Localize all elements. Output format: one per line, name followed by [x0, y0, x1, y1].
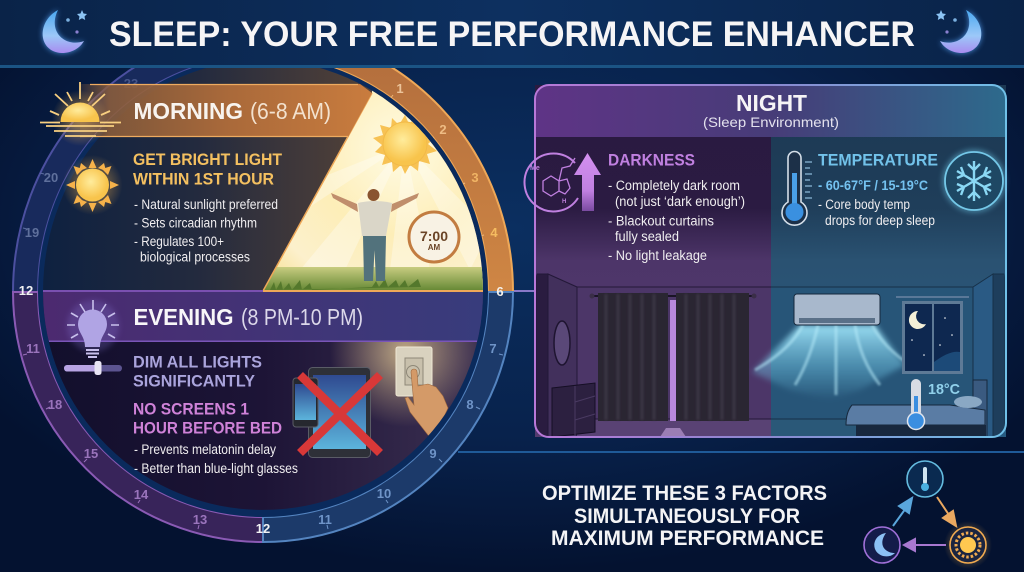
icon: sun node	[944, 521, 992, 569]
man with raised arms	[331, 189, 419, 281]
darkness bullet list: - Blackout curtains	[608, 214, 714, 228]
icon: crossed out phone and tablet	[293, 368, 380, 458]
hour numbers: 2	[439, 122, 447, 137]
night header: (Sleep Environment)	[703, 114, 839, 130]
temperature bullet list: - Core body temp	[818, 197, 910, 212]
icon: right crescent moon with stars	[936, 10, 981, 53]
darkness column	[525, 150, 745, 263]
morning heading: MORNING	[134, 98, 243, 124]
morning heading band	[80, 84, 372, 137]
hour numbers: 8	[466, 397, 474, 412]
icon: left crescent moon with stars	[43, 10, 87, 53]
blackout curtains	[590, 293, 756, 437]
panel: night sleep environment	[525, 85, 1006, 437]
window with moon	[896, 297, 969, 374]
evening action headings: NO SCREENS 1	[133, 400, 249, 418]
darkness bullet list: (not just ‘dark enough’)	[615, 194, 745, 209]
left side of room	[536, 274, 771, 437]
icon: temperature node	[907, 461, 943, 497]
bed	[846, 380, 987, 437]
night header	[535, 85, 1006, 137]
evening time: (8 PM-10 PM)	[241, 304, 363, 330]
closing message: MAXIMUM PERFORMANCE	[551, 527, 824, 550]
temperature heading: TEMPERATURE	[818, 150, 938, 170]
hour numbers: 10	[377, 486, 391, 501]
darkness bullet list: - No light leakage	[608, 248, 707, 263]
panel: morning	[40, 60, 490, 292]
icon: photo sun	[373, 115, 437, 174]
morning bullet list	[134, 197, 278, 264]
icon: dimmable light bulb with slider	[64, 300, 122, 375]
temperature bullet list: - 60-67°F / 15-19°C	[818, 178, 928, 193]
connector lines	[458, 290, 1024, 453]
icon: sunrise	[40, 82, 121, 146]
hour numbers: 20	[44, 170, 58, 185]
evening action headings	[133, 352, 282, 438]
icon: clock 7:00 AM: AM	[428, 243, 441, 252]
icon: snowflake	[945, 152, 1003, 210]
morning action heading: GET BRIGHT LIGHT	[133, 150, 283, 169]
temperature column	[782, 150, 1003, 228]
icon: clock 7:00 AM	[409, 212, 459, 262]
bedroom illustration	[536, 274, 1005, 437]
hour numbers: 13	[193, 512, 207, 527]
closing message	[542, 482, 827, 550]
hour numbers: 4	[490, 225, 498, 240]
morning bullet list: biological processes	[140, 250, 250, 264]
hour numbers: 9	[429, 446, 437, 461]
evening action headings: HOUR BEFORE BED	[133, 418, 282, 438]
closing message: SIMULTANEOUSLY FOR	[574, 505, 800, 528]
icon: sun	[62, 155, 122, 215]
darkness bullet list	[608, 178, 745, 263]
darkness heading: DARKNESS	[608, 150, 695, 170]
panel: evening	[43, 277, 483, 510]
room thermometer 18C	[908, 379, 960, 430]
icon: moon node	[864, 527, 900, 563]
darkness bullet list: fully sealed	[615, 229, 679, 244]
morning action heading	[133, 154, 282, 184]
morning bullet list: - Natural sunlight preferred	[134, 197, 278, 212]
cycle diagram: three factors	[864, 461, 992, 569]
icon: light switch with hand	[396, 347, 448, 438]
closing message: OPTIMIZE THESE 3 FACTORS	[542, 482, 827, 505]
arrow: temperature to sun	[937, 497, 956, 526]
arrow: moon to temperature	[893, 498, 912, 526]
hour numbers	[19, 76, 504, 536]
hour numbers: 15	[84, 446, 98, 461]
arrow: melatonin up	[574, 153, 601, 211]
title banner	[0, 0, 1024, 68]
hour numbers: 7	[489, 341, 497, 356]
icon: clock 7:00 AM: 7:00	[420, 228, 448, 244]
24-hour clock ring	[13, 30, 513, 542]
navy gap around the clock disk	[38, 56, 488, 517]
morning action heading: WITHIN 1ST HOUR	[133, 170, 274, 188]
air conditioner and airflow	[752, 294, 902, 396]
hour numbers: 1	[396, 81, 404, 96]
hour numbers: 12	[256, 521, 270, 536]
morning bullet list: - Sets circadian rhythm	[134, 216, 257, 230]
temperature bullet list	[818, 178, 935, 228]
hour numbers: 23	[124, 76, 138, 91]
hour numbers: 18	[48, 397, 62, 412]
night header: NIGHT	[736, 90, 807, 116]
icon: melatonin molecule	[525, 153, 601, 211]
right side of room	[771, 274, 1005, 437]
hour ticks	[23, 95, 503, 529]
icon: melatonin molecule: H	[562, 199, 566, 205]
temperature bullet list: drops for deep sleep	[825, 213, 935, 228]
title: SLEEP: YOUR FREE PERFORMANCE ENHANCER	[109, 15, 915, 54]
hour numbers: 19	[25, 225, 39, 240]
room thermometer 18C: 18°C	[928, 381, 960, 398]
hour numbers: 14	[134, 487, 149, 502]
morning photo: man greeting sun	[262, 90, 483, 290]
darkness bullet list: - Completely dark room	[608, 178, 740, 193]
hour numbers: 3	[471, 170, 479, 185]
evening bullet list: - Better than blue-light glasses	[134, 461, 298, 476]
red X	[300, 375, 380, 453]
hour numbers: 11	[318, 512, 332, 527]
morning bullet list: - Regulates 100+	[134, 234, 224, 249]
hour numbers: 11	[26, 341, 40, 356]
evening action headings: SIGNIFICANTLY	[133, 372, 256, 390]
arrow: sun to moon	[904, 539, 946, 551]
hour numbers: 6	[496, 284, 504, 299]
icon: thermometer	[782, 152, 812, 225]
evening heading: EVENING	[134, 304, 234, 330]
hour numbers: 12	[19, 283, 33, 298]
morning time: (6-8 AM)	[250, 98, 331, 124]
evening action headings: DIM ALL LIGHTS	[133, 352, 262, 372]
icon: melatonin molecule: Me	[530, 165, 540, 172]
evening heading band	[43, 292, 483, 342]
panel border	[535, 85, 1006, 437]
evening bullet list	[134, 442, 298, 476]
evening bullet list: - Prevents melatonin delay	[134, 442, 276, 457]
